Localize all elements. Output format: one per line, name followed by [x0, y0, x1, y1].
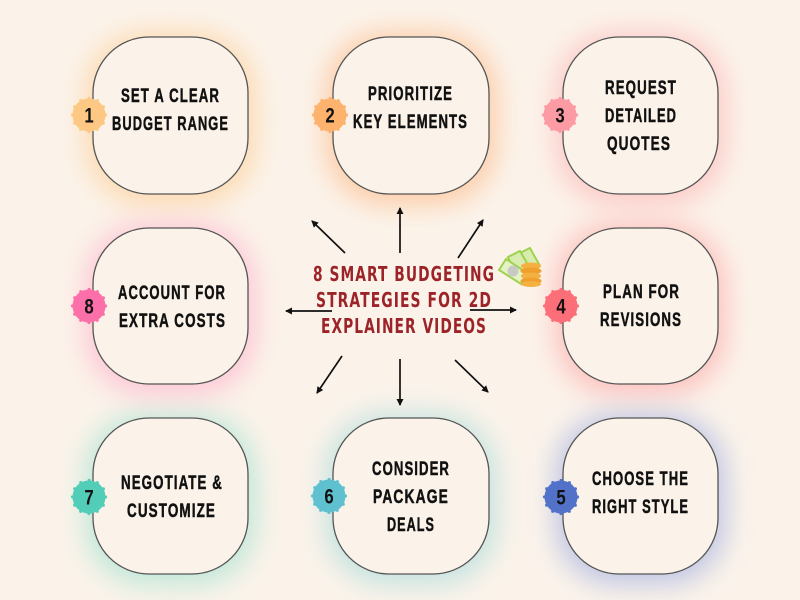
card 3: request detailed quotes: [544, 33, 725, 204]
badge 4: [544, 290, 578, 322]
badge 3: [544, 98, 576, 132]
card 1 label: BUDGET RANGE: [112, 113, 229, 135]
card 6 label: PACKAGE: [373, 486, 449, 508]
card 2 label: PRIORITIZE: [368, 83, 453, 105]
card 8: account for extra costs: [72, 224, 255, 394]
card 4 label: REVISIONS: [600, 309, 682, 331]
card 7: negotiate and customize: [72, 414, 255, 584]
badge 4: 4: [556, 296, 566, 319]
card 3 label: DETAILED: [605, 105, 677, 127]
badge 7: 7: [84, 487, 94, 510]
badge 1: [72, 98, 106, 132]
badge 2: [314, 98, 346, 132]
card 4: plan for revisions: [544, 224, 725, 394]
card 1: set a clear budget range: [72, 33, 255, 204]
title: 8 SMART BUDGETING: [313, 262, 495, 286]
card 1 label: SET A CLEAR: [121, 85, 220, 107]
card 3 label: QUOTES: [607, 133, 671, 155]
card 2: prioritize key elements: [314, 33, 496, 204]
card 2 label: KEY ELEMENTS: [353, 111, 468, 133]
card 3 label: REQUEST: [605, 77, 677, 99]
card 6: consider package deals: [312, 414, 496, 584]
card 6 label: CONSIDER: [372, 458, 450, 480]
badge 6: 6: [324, 486, 334, 509]
badge 8: [72, 290, 106, 322]
title: EXPLAINER VIDEOS: [321, 314, 487, 338]
card 5 label: CHOOSE THE: [592, 468, 689, 490]
card 7 label: NEGOTIATE &: [121, 472, 223, 494]
badge 6: [312, 480, 346, 512]
icon: money and coins: [499, 248, 542, 287]
card 5 label: RIGHT STYLE: [592, 496, 689, 518]
badge 5: [544, 480, 578, 514]
badge 1: 1: [84, 105, 94, 128]
title: STRATEGIES FOR 2D: [316, 288, 492, 312]
card 6 label: DEALS: [387, 514, 435, 536]
card 4 label: PLAN FOR: [603, 281, 680, 303]
card 5: choose the right style: [544, 414, 725, 584]
card 8 label: ACCOUNT FOR: [118, 282, 226, 304]
badge 2: 2: [325, 105, 335, 128]
badge 3: 3: [555, 105, 565, 128]
card 8 label: EXTRA COSTS: [119, 310, 226, 332]
badge 5: 5: [556, 487, 566, 510]
badge 7: [72, 480, 106, 514]
badge 8: 8: [84, 296, 94, 319]
card 7 label: CUSTOMIZE: [127, 500, 216, 522]
arrows radiating from title: [286, 208, 516, 405]
